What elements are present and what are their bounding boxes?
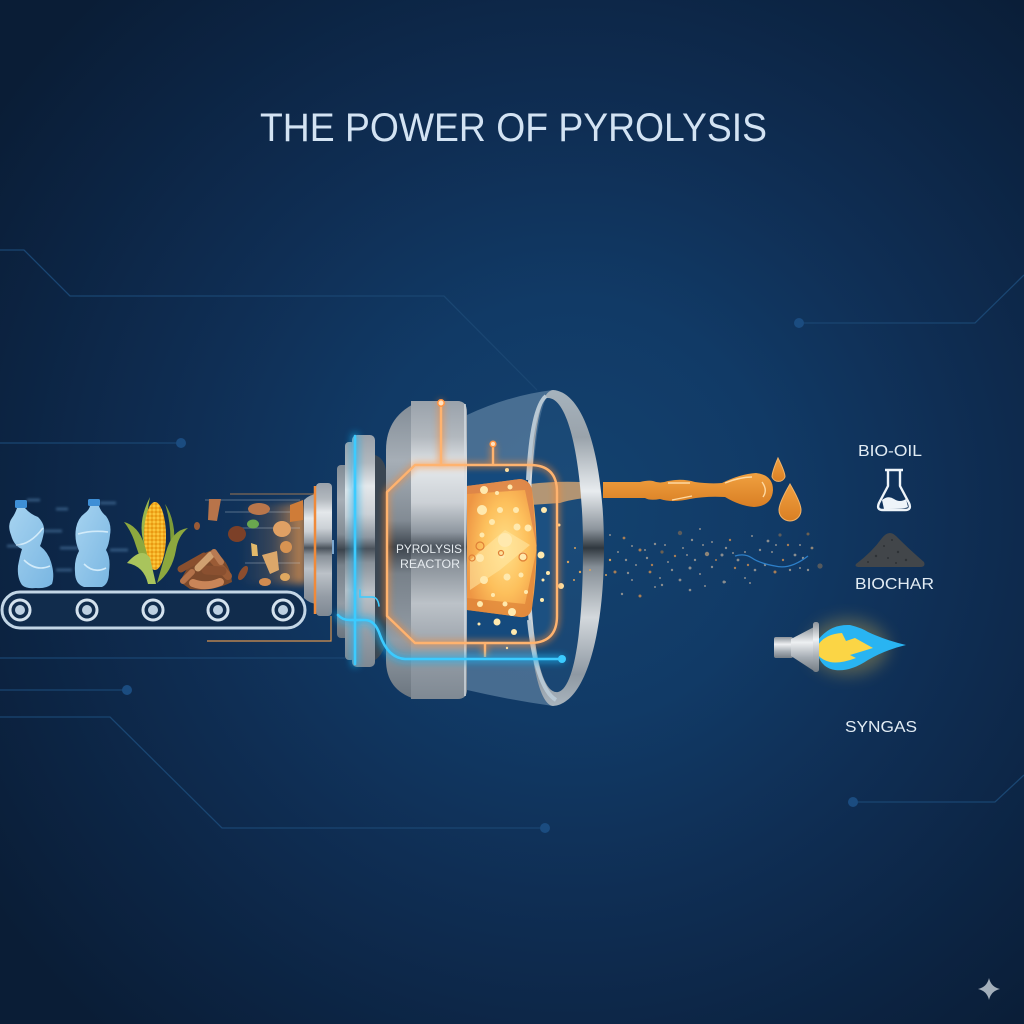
icon: corn cob [124, 497, 188, 584]
icon: plastic bottle 2 [60, 499, 128, 587]
icon: syngas flame [818, 625, 906, 670]
pale oil stream inside chamber [530, 482, 600, 505]
glass cone chamber [467, 390, 553, 706]
icon: biochar pile [856, 533, 924, 567]
blue coolant conduit [338, 436, 566, 664]
middle flange with blue conduit [337, 435, 386, 667]
label: biochar: BIOCHAR [855, 576, 934, 593]
heated core [467, 468, 564, 649]
conveyor belt [2, 592, 305, 628]
icon: flask [878, 470, 910, 510]
label: bio-oil: BIO-OIL [858, 443, 922, 460]
small inlet flange [304, 483, 334, 616]
circuit lines [0, 250, 1024, 833]
ring interior glass [530, 398, 583, 692]
icon: flying biomass fragments [194, 499, 303, 586]
main reactor body [386, 401, 467, 699]
bio-oil stream [603, 473, 773, 507]
flame glow [808, 619, 888, 675]
reactor label: PYROLYSIS [396, 544, 462, 556]
label: syngas: SYNGAS [845, 719, 917, 736]
title: THE POWER OF PYROLYSIS [260, 106, 767, 150]
biochar particle stream [567, 528, 823, 598]
icon: sparkle watermark [978, 978, 1000, 1000]
orange heating circuit [387, 400, 557, 657]
icon: syngas burner nozzle [774, 622, 819, 672]
feed tube with moving biomass [205, 494, 331, 641]
bio-oil droplets [772, 458, 801, 521]
dark chamber interior [467, 465, 557, 643]
reactor label second line: REACTOR [400, 559, 460, 571]
icon: biomass chips pile [180, 550, 232, 590]
outlet ring [526, 390, 604, 706]
icon: plastic bottle 1 [7, 500, 72, 588]
